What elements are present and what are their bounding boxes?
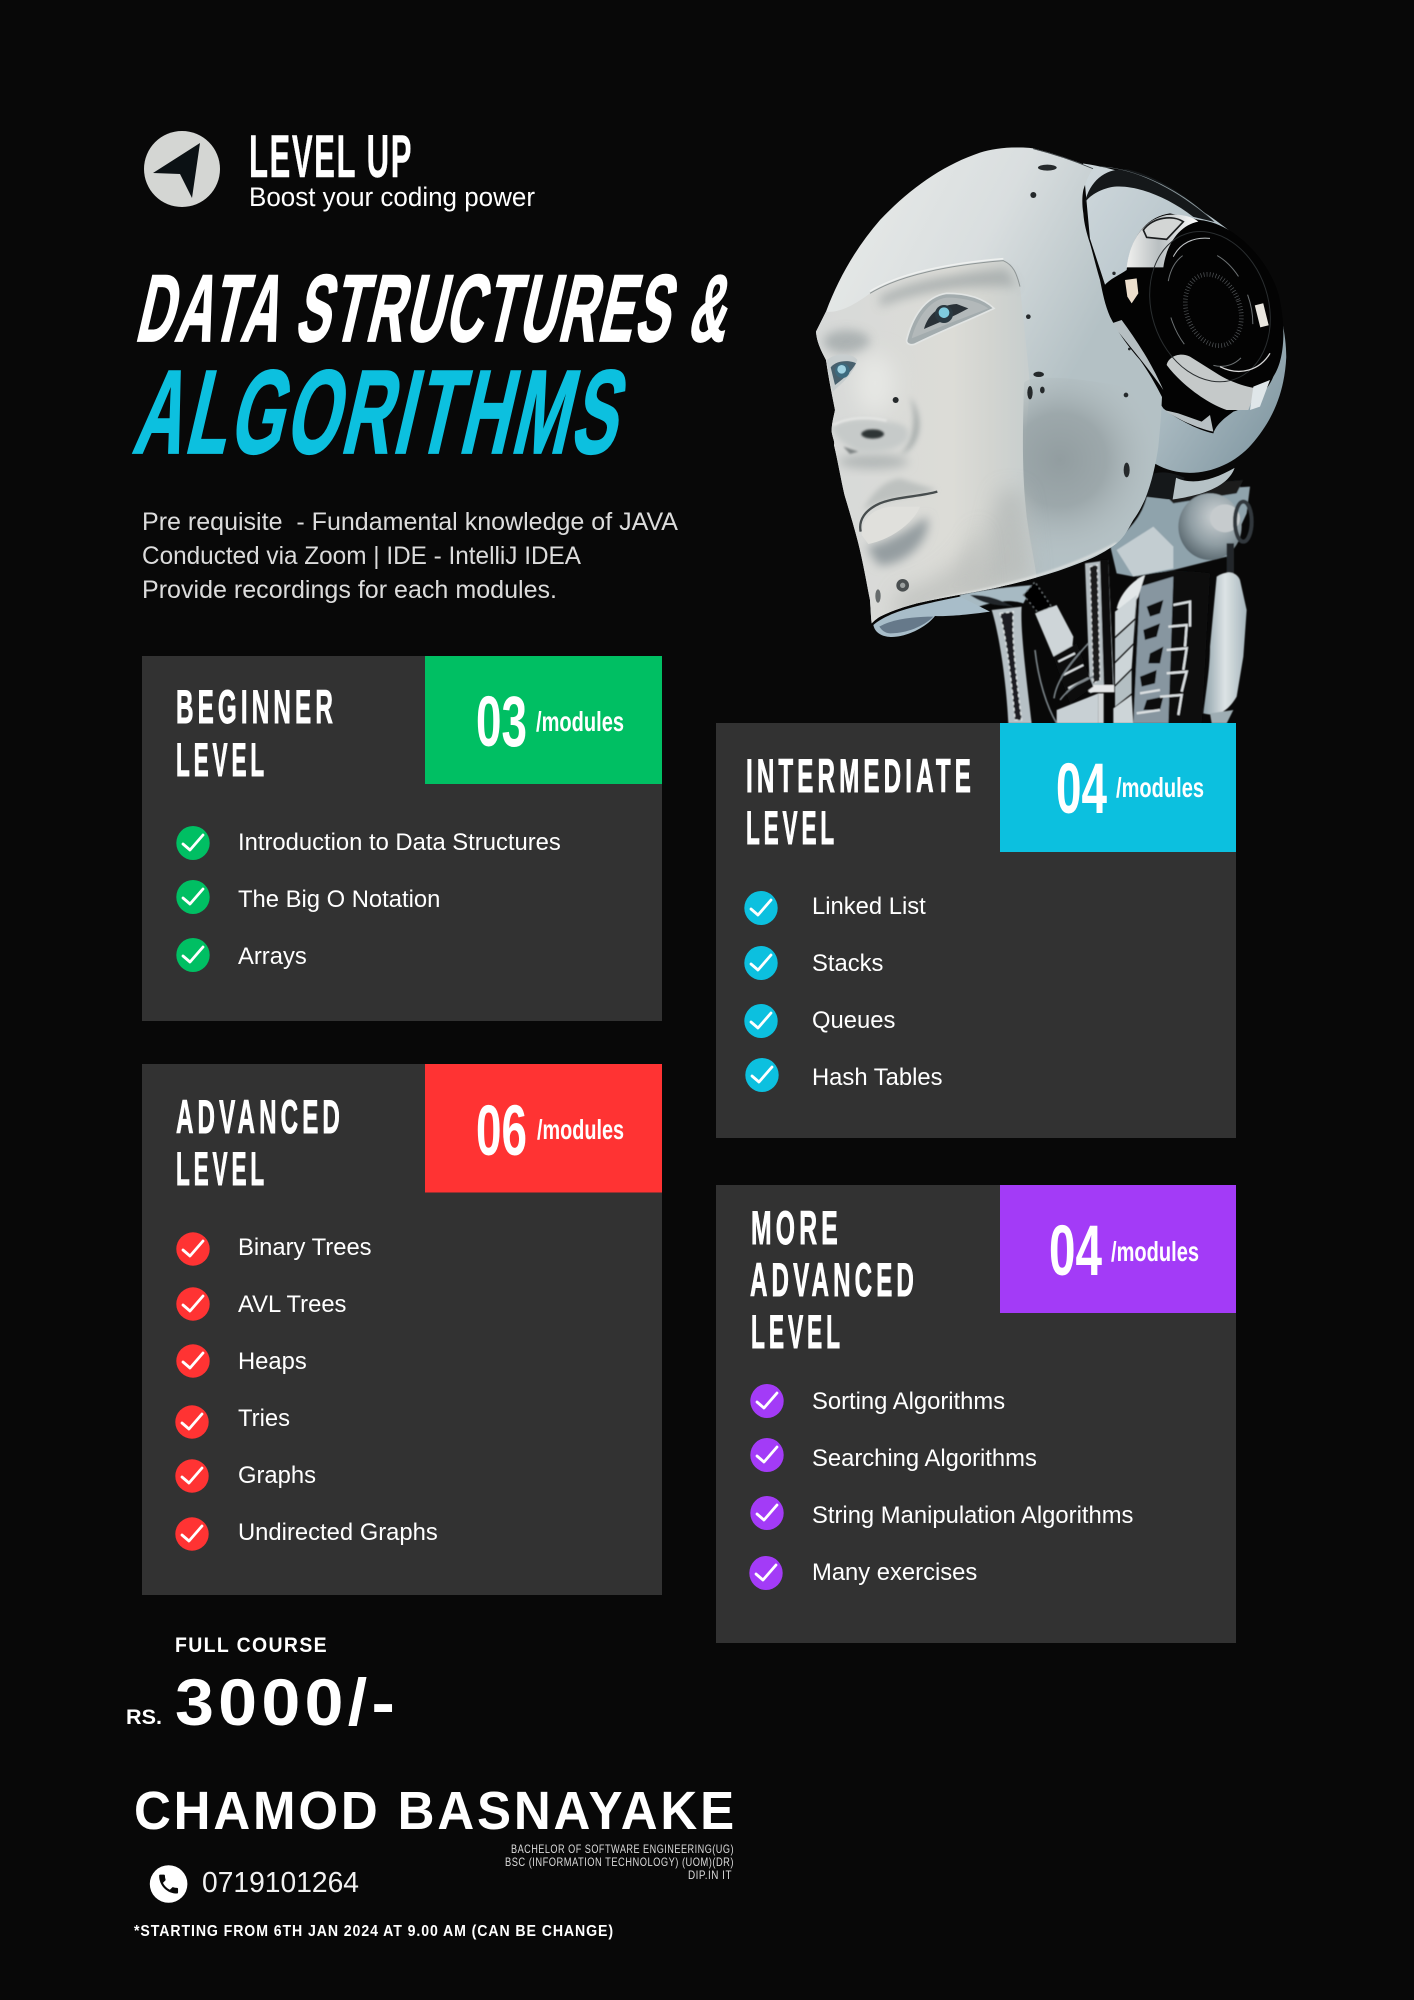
badge: intermediate modules xyxy=(1000,723,1236,852)
badge: intermediate modules: 04 xyxy=(1056,750,1107,829)
list: more advanced topics: Sorting Algorithms xyxy=(812,1388,1005,1415)
price block xyxy=(126,1633,399,1739)
instructor qualifications: BACHELOR OF SOFTWARE ENGINEERING(UG) xyxy=(511,1843,734,1856)
badge: beginner modules: 03 xyxy=(476,683,527,762)
list: more advanced topics: Many exercises xyxy=(812,1559,977,1586)
price block: FULL COURSE xyxy=(175,1633,328,1657)
heading: intermediate level xyxy=(746,749,975,854)
panel: advanced level xyxy=(142,1064,662,1595)
list: more advanced topics xyxy=(749,1384,1134,1590)
heading: more advanced level xyxy=(750,1201,918,1358)
badge: more advanced modules: 04 xyxy=(1049,1212,1102,1291)
list: intermediate topics xyxy=(744,891,943,1092)
heading: intermediate level: LEVEL xyxy=(746,801,838,854)
list: intermediate topics: Stacks xyxy=(812,950,884,977)
course notes xyxy=(142,508,678,604)
screw holes xyxy=(875,165,1131,603)
badge: beginner modules xyxy=(425,656,662,784)
heading: more advanced level: MORE xyxy=(751,1201,842,1254)
robot neck xyxy=(960,480,1252,723)
course notes: Pre requisite - Fundamental knowledge of JAVA xyxy=(142,508,678,536)
instructor qualifications xyxy=(505,1843,734,1882)
list: advanced topics xyxy=(175,1232,438,1551)
heading: level up: LEVEL UP xyxy=(249,123,413,190)
badge: more advanced modules xyxy=(1000,1185,1236,1313)
list: advanced topics: Graphs xyxy=(238,1462,316,1489)
heading: beginner level: BEGINNER xyxy=(176,680,337,733)
heading: beginner level xyxy=(176,680,337,786)
course notes: Provide recordings for each modules. xyxy=(142,576,557,604)
title: data structures: DATA STRUCTURES & xyxy=(129,256,746,362)
list: intermediate topics: Queues xyxy=(812,1007,895,1034)
panel: beginner level xyxy=(142,656,662,1021)
list: more advanced topics: Searching Algorithms xyxy=(812,1445,1037,1472)
badge: advanced modules: /modules xyxy=(537,1114,624,1145)
panel: more advanced level xyxy=(716,1185,1236,1643)
list: advanced topics: Binary Trees xyxy=(238,1234,372,1261)
list: advanced topics: Heaps xyxy=(238,1348,307,1375)
list: advanced topics: Tries xyxy=(238,1405,290,1432)
list: intermediate topics: Hash Tables xyxy=(812,1064,943,1091)
robot ear lens xyxy=(1102,213,1289,433)
nose xyxy=(832,397,919,469)
title: algorithms: ALGORITHMS xyxy=(125,345,642,479)
instructor name: CHAMOD BASNAYAKE xyxy=(134,1781,737,1841)
price block: 3000/- xyxy=(175,1665,399,1739)
robot skull back xyxy=(1083,163,1286,499)
badge: beginner modules: /modules xyxy=(536,706,624,737)
badge: intermediate modules: /modules xyxy=(1116,772,1204,803)
panel: intermediate level xyxy=(716,723,1236,1138)
tagline: Boost your coding power xyxy=(249,182,535,212)
list: beginner topics xyxy=(176,826,561,972)
list: intermediate topics: Linked List xyxy=(812,893,926,920)
icon: phone xyxy=(150,1865,187,1903)
chin underside xyxy=(873,597,990,637)
instructor qualifications: BSC (INFORMATION TECHNOLOGY) (UOM)(DR) xyxy=(505,1856,734,1869)
list: advanced topics: Undirected Graphs xyxy=(238,1519,438,1546)
mouth xyxy=(860,478,937,565)
list: advanced topics: AVL Trees xyxy=(238,1291,347,1318)
right eye xyxy=(907,293,994,345)
price block: RS. xyxy=(126,1705,162,1729)
instructor qualifications: DIP.IN IT xyxy=(688,1869,732,1882)
start date note: *STARTING FROM 6TH JAN 2024 AT 9.00 AM (CAN BE CHANGE) xyxy=(134,1923,614,1940)
robot face xyxy=(816,147,1162,637)
list: beginner topics: Arrays xyxy=(238,943,307,970)
left eye xyxy=(827,354,857,392)
heading: beginner level: LEVEL xyxy=(176,733,268,786)
heading: advanced level: LEVEL xyxy=(176,1142,268,1195)
list: more advanced topics: String Manipulation Algorithms xyxy=(812,1502,1134,1529)
heading: advanced level: ADVANCED xyxy=(176,1090,344,1143)
heading: advanced level xyxy=(176,1090,344,1195)
icon: navigation arrow xyxy=(144,131,220,207)
badge: advanced modules xyxy=(425,1064,662,1192)
heading: more advanced level: LEVEL xyxy=(751,1305,844,1358)
robot head illustration xyxy=(800,130,1289,723)
badge: more advanced modules: /modules xyxy=(1111,1236,1199,1267)
heading: intermediate level: INTERMEDIATE xyxy=(746,749,975,802)
badge: advanced modules: 06 xyxy=(476,1092,527,1171)
list: beginner topics: Introduction to Data Structures xyxy=(238,829,561,856)
course notes: Conducted via Zoom | IDE - IntelliJ IDEA xyxy=(142,542,581,570)
list: beginner topics: The Big O Notation xyxy=(238,886,440,913)
phone number: 0719101264 xyxy=(202,1867,359,1899)
heading: more advanced level: ADVANCED xyxy=(750,1253,918,1306)
